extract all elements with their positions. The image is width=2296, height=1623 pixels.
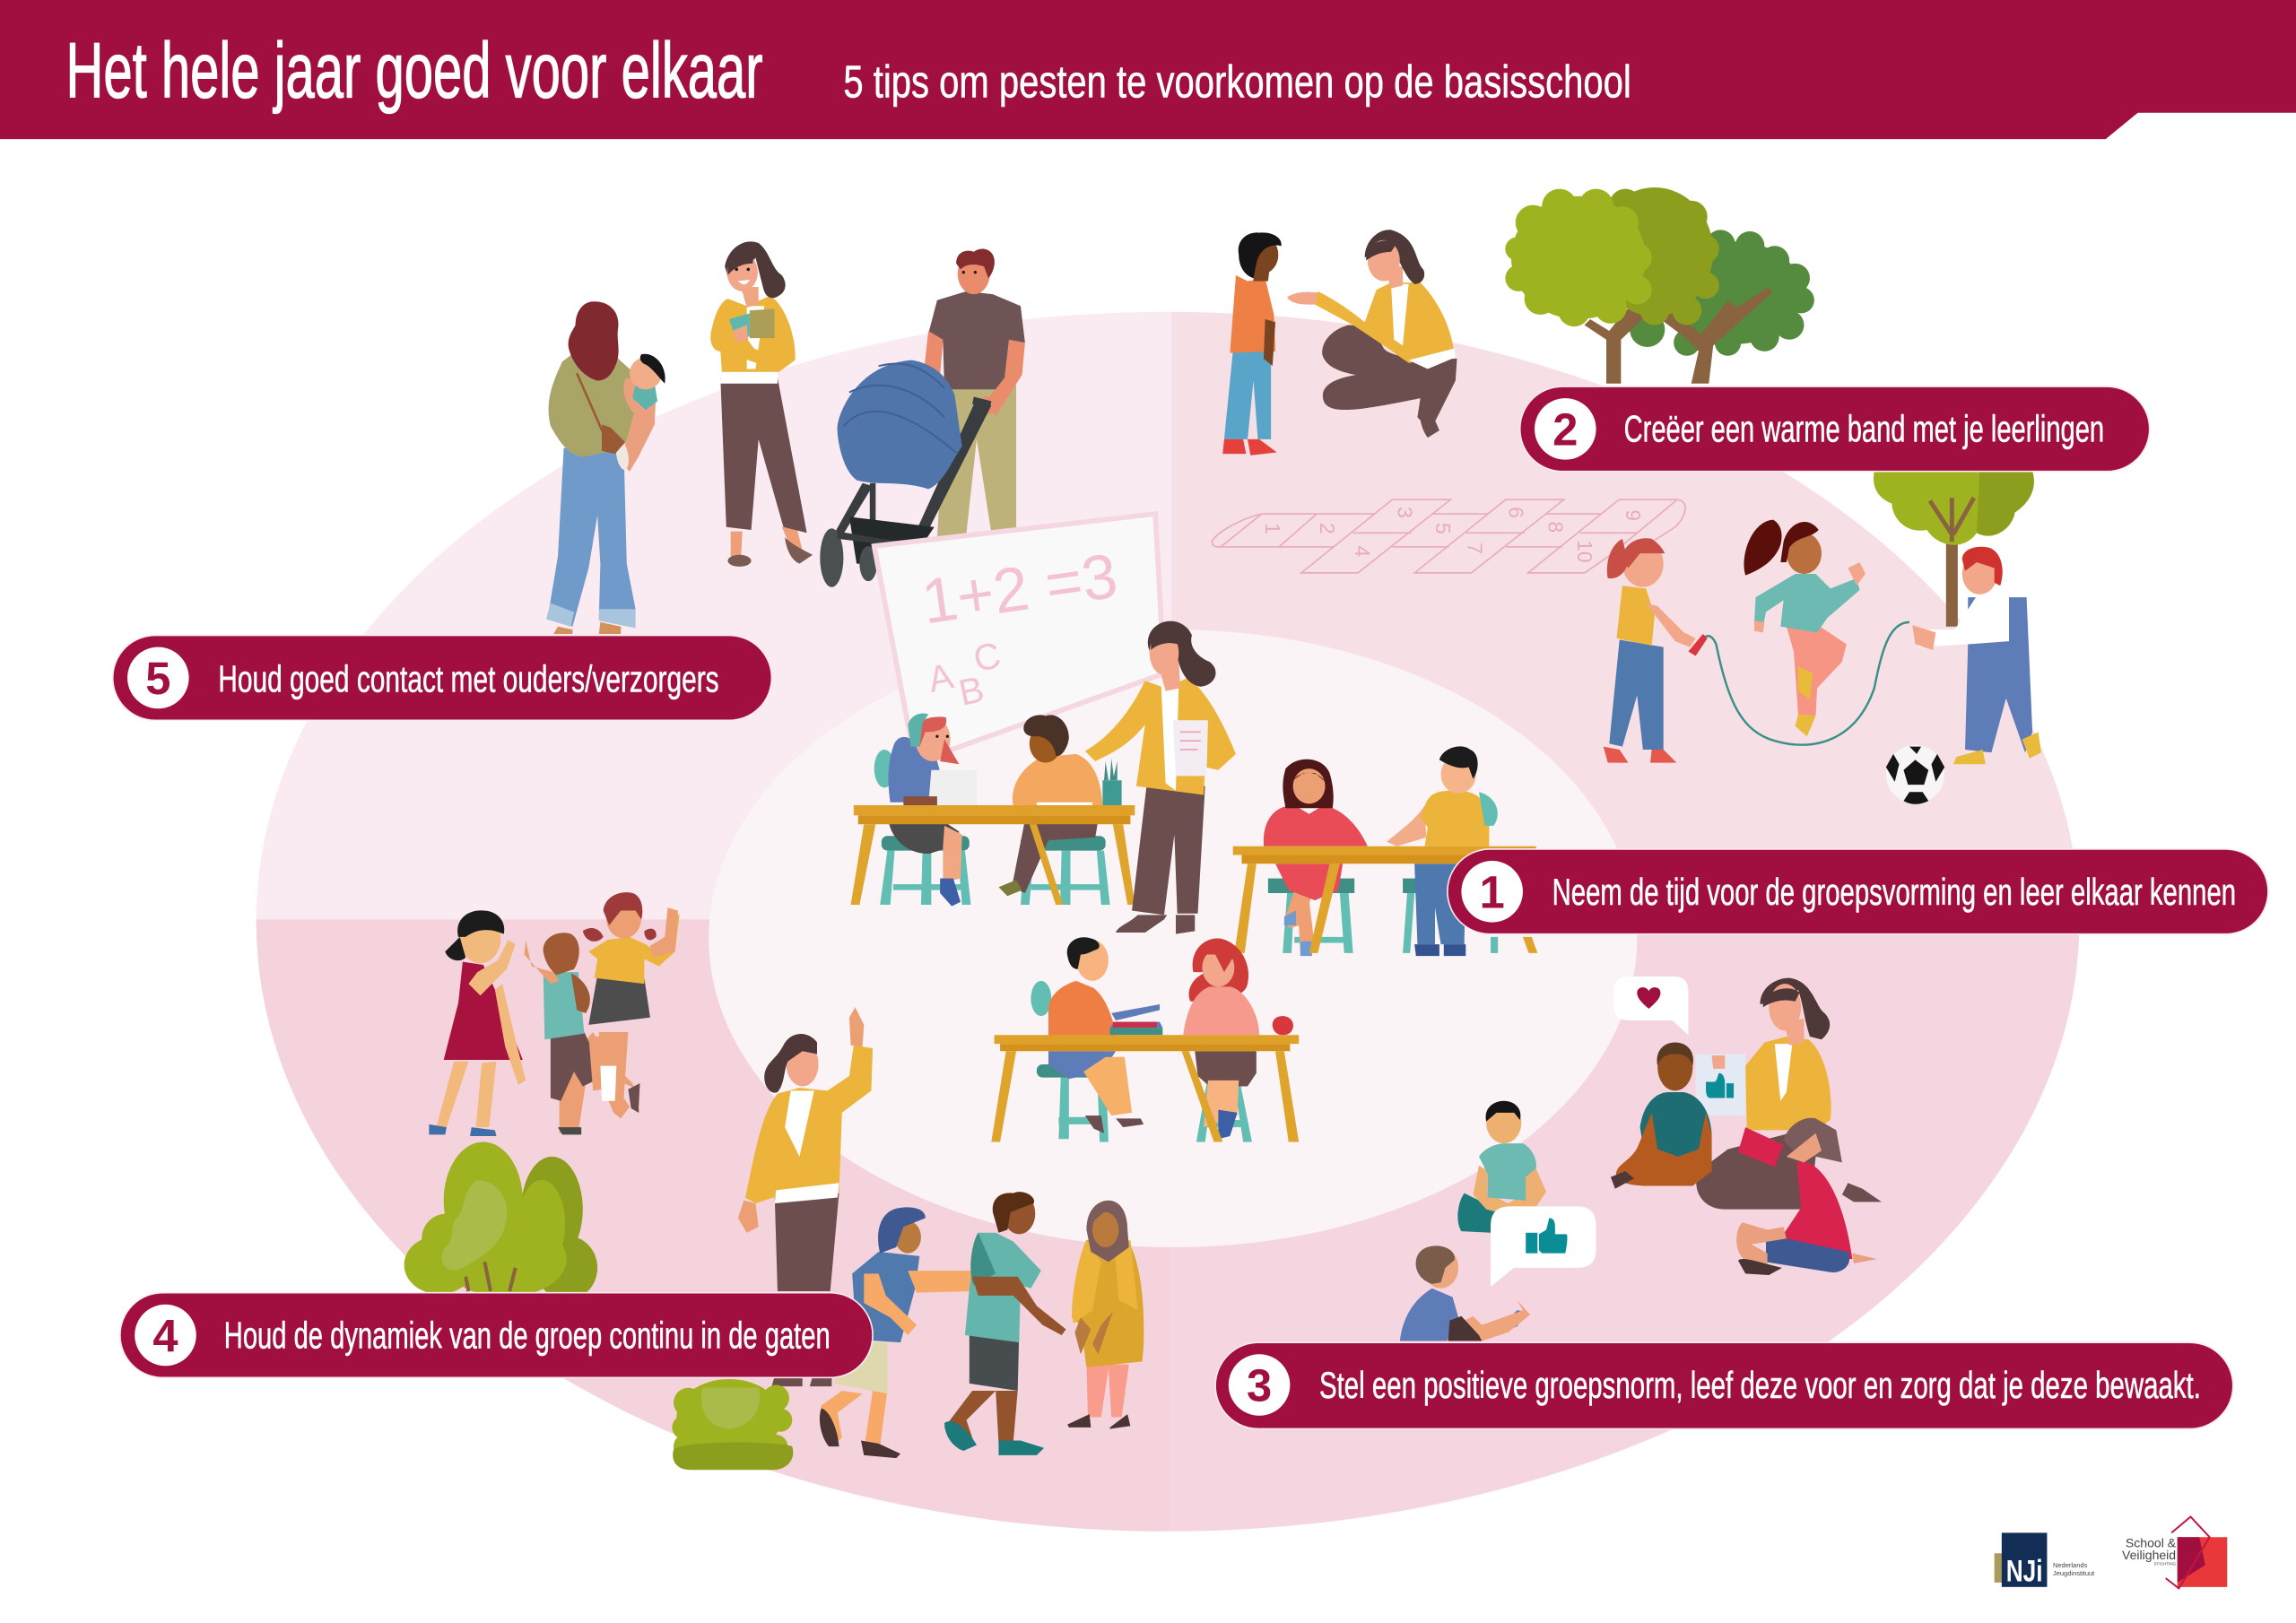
logo: School & Veiligheid: STICHTING	[2154, 1561, 2177, 1566]
hopscotch drawn on ground: 5	[1431, 523, 1455, 534]
background: concentric ellipse quadrants	[257, 312, 2079, 1532]
figure: teacher holding books	[710, 241, 813, 567]
bush lower middle	[672, 1379, 793, 1470]
tip 2 pill	[1520, 386, 2150, 472]
hopscotch drawn on ground	[1212, 499, 1685, 573]
figure: mother with baby seen from behind	[546, 301, 665, 634]
hopscotch drawn on ground: 1	[1261, 523, 1284, 534]
speech bubble with heart	[1613, 976, 1688, 1035]
tip 4 pill: Houd de dynamiek van de groep continu in de gaten	[224, 1315, 831, 1357]
children giving high five	[429, 892, 680, 1136]
boy sitting seen from behind	[1400, 1245, 1530, 1341]
tip 1 pill: 1	[1480, 866, 1505, 917]
figure: boy in orange hoodie	[1222, 232, 1282, 456]
classroom desk 2 with two pupils	[1233, 746, 1537, 956]
whiteboard with sums: B	[955, 668, 987, 714]
hopscotch drawn on ground: 7	[1464, 542, 1487, 554]
logo: NJi Nederlands Jeugdinstituut	[1995, 1532, 2095, 1588]
hopscotch drawn on ground: 6	[1504, 507, 1527, 518]
logo: NJi Nederlands Jeugdinstituut: Jeugdinstituut	[2053, 1569, 2095, 1577]
speech bubble with thumbs up	[1491, 1206, 1596, 1287]
teacher standing at desk	[1085, 621, 1236, 934]
tip 4 pill: 4	[152, 1310, 178, 1361]
tip 5 pill: 5	[145, 653, 170, 704]
tip 3 pill: 3	[1247, 1359, 1272, 1410]
figure: teacher crouching	[1287, 230, 1457, 438]
logo: School & Veiligheid: Veiligheid	[2122, 1548, 2176, 1562]
logo: NJi Nederlands Jeugdinstituut: NJi	[2006, 1554, 2043, 1588]
whiteboard with sums	[874, 514, 1164, 750]
whiteboard with sums: A	[925, 655, 958, 700]
classroom desk 3 with two pupils	[991, 937, 1299, 1141]
title: Het hele jaar goed voor elkaar	[65, 26, 763, 114]
figure: father with stroller	[820, 249, 1025, 587]
whiteboard with sums: 1+2 =3	[918, 540, 1122, 637]
jump rope scene with three children	[1604, 520, 2041, 764]
tree behind jump rope boy	[1874, 472, 2034, 627]
soccer ball	[1886, 745, 1944, 804]
teacher with raised hand	[738, 1007, 873, 1386]
sitting teacher with pupils and thumbs-up card	[1611, 978, 1882, 1275]
logo: NJi Nederlands Jeugdinstituut: Nederlands	[2053, 1561, 2088, 1569]
hopscotch drawn on ground: 8	[1544, 521, 1568, 533]
logo: School & Veiligheid	[2122, 1516, 2227, 1588]
trees top right	[1505, 187, 1814, 384]
logo: School & Veiligheid: School &	[2126, 1536, 2177, 1550]
tip 2 pill: Creëer een warme band met je leerlingen	[1624, 407, 2104, 449]
classroom desk 1 with two pupils	[851, 714, 1135, 907]
hopscotch drawn on ground: 10	[1573, 540, 1596, 563]
tip 4 pill	[120, 1293, 873, 1377]
header banner	[0, 0, 2296, 139]
tip 5 pill: Houd goed contact met ouders/verzorgers	[218, 657, 719, 699]
tip 5 pill	[113, 636, 771, 720]
children: boy in cap, boy in teal shirt, girl in hijab	[820, 1192, 1144, 1458]
hopscotch drawn on ground: 9	[1622, 509, 1645, 521]
bush lower left	[404, 1141, 597, 1300]
hopscotch drawn on ground: 2	[1316, 523, 1339, 534]
tip 2 pill: 2	[1552, 404, 1578, 455]
whiteboard with sums: C	[970, 634, 1004, 680]
boy sitting cross-legged in teal shirt	[1457, 1101, 1546, 1233]
subtitle: 5 tips om pesten te voorkomen op de basisschool	[843, 56, 1631, 107]
hopscotch drawn on ground: 4	[1351, 546, 1374, 558]
tip 1 pill	[1448, 849, 2268, 934]
tip 3 pill	[1215, 1342, 2233, 1428]
hopscotch drawn on ground: 3	[1393, 507, 1416, 518]
